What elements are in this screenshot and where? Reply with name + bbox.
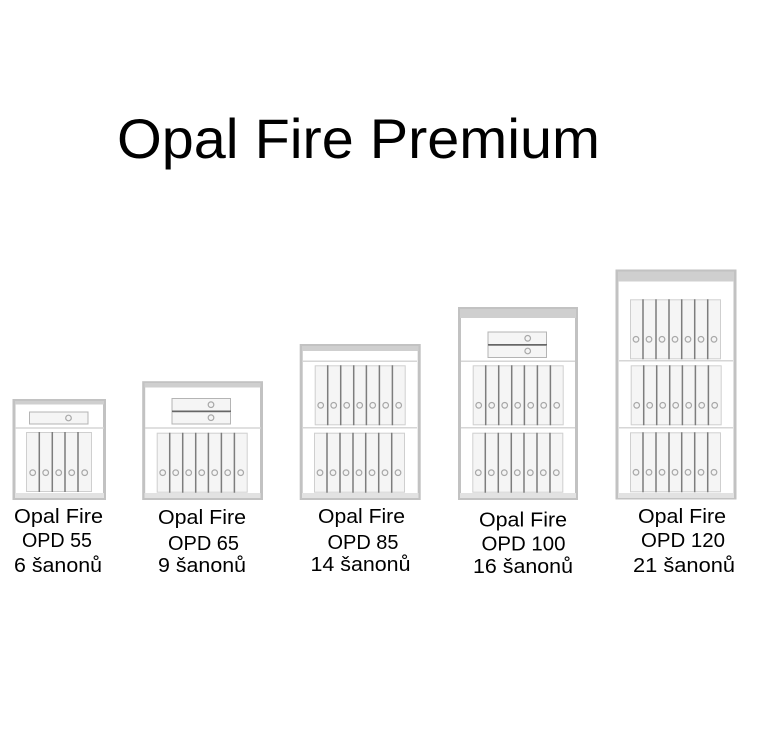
drawer <box>30 412 88 424</box>
caption: OPD 120: OPD 120 <box>641 530 725 552</box>
caption: OPD 55: 6 šanonů <box>14 555 102 577</box>
caption: OPD 65: Opal Fire <box>158 507 246 529</box>
drawers <box>488 332 547 358</box>
title: Opal Fire Premium <box>117 107 600 170</box>
binders: 21 <box>630 299 721 492</box>
caption: OPD 100: 16 šanonů <box>473 556 573 578</box>
caption: OPD 85: Opal Fire <box>318 506 405 528</box>
binders: 14 <box>314 365 405 493</box>
caption: OPD 65: 9 šanonů <box>158 555 246 577</box>
safe: OPD 100 <box>460 308 576 498</box>
caption: OPD 85: 14 šanonů <box>310 554 410 576</box>
caption: OPD 100: OPD 100 <box>482 534 566 556</box>
caption: OPD 55: Opal Fire <box>14 506 103 528</box>
safe: OPD 120 <box>617 271 735 498</box>
binders: 6 <box>26 432 92 492</box>
safe: OPD 55 <box>14 400 104 498</box>
drawers <box>172 398 231 424</box>
caption: OPD 120 <box>633 506 735 577</box>
caption: OPD 100 <box>473 510 573 578</box>
caption: OPD 65: OPD 65 <box>168 533 239 555</box>
safe: OPD 85 <box>301 346 419 498</box>
caption: OPD 100: Opal Fire <box>479 510 567 532</box>
caption: OPD 55: OPD 55 <box>22 530 92 552</box>
caption: OPD 85 <box>310 506 410 576</box>
caption: OPD 55 <box>14 506 103 577</box>
caption: OPD 85: OPD 85 <box>328 532 398 554</box>
binders: 16 <box>473 365 563 493</box>
caption: OPD 120: Opal Fire <box>638 506 726 528</box>
safe: OPD 65 <box>144 383 262 498</box>
binders: 9 <box>157 433 247 493</box>
caption: OPD 120: 21 šanonů <box>633 555 735 577</box>
caption: OPD 65 <box>158 507 246 577</box>
